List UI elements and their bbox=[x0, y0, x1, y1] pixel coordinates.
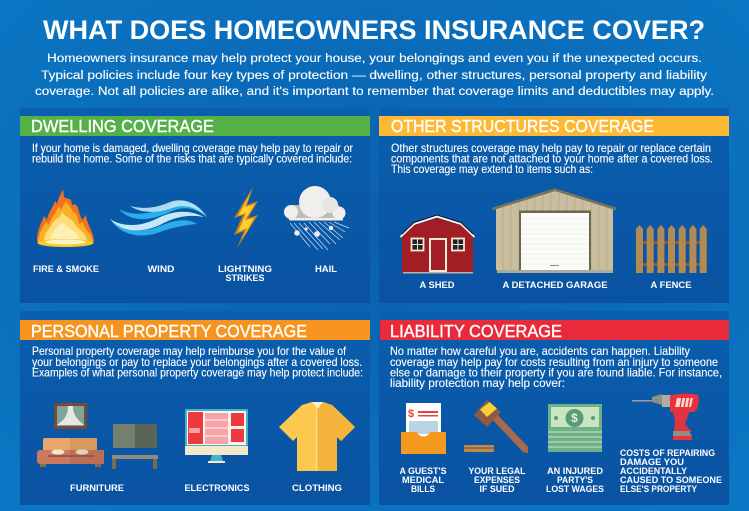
label: a guest's medical bills: A GUEST'S bbox=[400, 465, 446, 476]
icon: medical bills: $ bbox=[408, 408, 414, 420]
liability text: else or damage to their property if you are found liable. For instance, bbox=[390, 366, 722, 380]
label: fire & smoke: FIRE & SMOKE bbox=[33, 263, 99, 274]
label: a detached garage: A DETACHED GARAGE bbox=[502, 279, 608, 290]
other structures text: components that are not attached to your home after a covered loss. bbox=[391, 152, 713, 166]
panel: liability coverage bbox=[379, 311, 729, 505]
label: electronics: ELECTRONICS bbox=[184, 482, 250, 493]
liability text: No matter how careful you are, accidents can happen. Liability bbox=[390, 345, 690, 358]
heading: other structures coverage: OTHER STRUCTURES COVERAGE bbox=[391, 116, 654, 136]
icon: gavel bbox=[464, 400, 528, 453]
icon: wind bbox=[110, 200, 207, 236]
panel: dwelling coverage bbox=[20, 108, 370, 303]
label: an injured party's lost wages bbox=[546, 465, 604, 494]
label: your legal expenses if sued: IF SUED bbox=[480, 483, 515, 494]
label: a guest's medical bills: BILLS bbox=[411, 483, 435, 494]
personal property text: Examples of what personal property coverage may help protect include: bbox=[32, 366, 363, 380]
label: an injured party's lost wages: AN INJURED bbox=[547, 465, 603, 476]
label: costs of repairing damage bbox=[620, 447, 722, 494]
label: lightning strikes: LIGHTNING bbox=[218, 263, 272, 274]
icon: fence bbox=[636, 225, 707, 273]
label: hail: HAIL bbox=[315, 263, 337, 274]
label: your legal expenses if sued: EXPENSES bbox=[474, 474, 520, 485]
label: lightning strikes bbox=[218, 263, 272, 283]
label: an injured party's lost wages: PARTY'S bbox=[557, 474, 593, 485]
label: costs of repairing damage: COSTS OF REPAIRING bbox=[620, 447, 715, 458]
label: costs of repairing damage: ELSE'S PROPERTY bbox=[620, 483, 698, 494]
label: costs of repairing damage: DAMAGE YOU bbox=[620, 456, 684, 467]
title: WHAT DOES HOMEOWNERS INSURANCE COVER? bbox=[43, 15, 705, 45]
label: a shed: A SHED bbox=[420, 279, 455, 290]
icon: medical bills bbox=[401, 403, 446, 454]
label: your legal expenses if sued bbox=[468, 465, 526, 494]
label: a fence: A FENCE bbox=[650, 279, 692, 290]
other structures text: This coverage may extend to items such as: bbox=[391, 163, 593, 176]
personal property text: your belongings or pay to replace your belongings after a covered loss. bbox=[32, 356, 362, 369]
panel: other structures coverage bbox=[379, 108, 729, 303]
liability text bbox=[390, 345, 722, 390]
icon: lost wages: $ bbox=[571, 411, 578, 425]
personal property text bbox=[32, 345, 363, 380]
icon: lost wages bbox=[548, 404, 602, 452]
personal property text: Personal property coverage may help reimburse you for the value of bbox=[32, 345, 347, 358]
icon: fire bbox=[37, 189, 94, 247]
icon: clothing bbox=[279, 402, 355, 471]
icon: drill bbox=[632, 394, 699, 440]
liability text: coverage may help pay for costs resulting from an injury to someone bbox=[390, 356, 718, 369]
liability text: liability protection may help cover: bbox=[390, 377, 565, 390]
heading: personal property coverage: PERSONAL PROPERTY COVERAGE bbox=[31, 321, 307, 341]
icon: hail bbox=[284, 186, 349, 250]
label: costs of repairing damage: ACCIDENTALLY bbox=[620, 465, 688, 476]
dwelling text: If your home is damaged, dwelling coverage may help pay to repair or bbox=[32, 142, 353, 155]
label: clothing: CLOTHING bbox=[292, 482, 342, 493]
label: a guest's medical bills bbox=[400, 465, 446, 494]
dwelling text: rebuild the home. Some of the risks that are typically covered include: bbox=[32, 152, 352, 166]
label: wind: WIND bbox=[148, 263, 175, 274]
label: an injured party's lost wages: LOST WAGES bbox=[546, 483, 604, 494]
icon: lightning bbox=[234, 187, 258, 248]
heading: liability coverage bbox=[380, 320, 729, 341]
intro text: Homeowners insurance may help protect your house, your belongings and even you if the unexpected occurs. bbox=[47, 51, 702, 65]
intro text: Typical policies include four key types of protection — dwelling, other structures, personal property and liability bbox=[41, 68, 708, 82]
other structures text: Other structures coverage may help pay to repair or replace certain bbox=[391, 142, 711, 155]
panel: personal property coverage bbox=[20, 311, 370, 505]
label: your legal expenses if sued: YOUR LEGAL bbox=[468, 465, 526, 476]
intro text: coverage. Not all policies are alike, and it's important to remember that coverage limits and deductibles may apply. bbox=[35, 84, 714, 98]
intro text bbox=[35, 51, 714, 98]
label: furniture: FURNITURE bbox=[70, 482, 124, 493]
label: lightning strikes: STRIKES bbox=[226, 272, 264, 283]
label: a guest's medical bills: MEDICAL bbox=[402, 474, 444, 485]
label: costs of repairing damage: CAUSED TO SOMEONE bbox=[620, 474, 722, 485]
icon: furniture bbox=[37, 403, 158, 469]
icon: shed bbox=[400, 215, 474, 274]
other structures text bbox=[391, 142, 713, 176]
heading: dwelling coverage bbox=[20, 116, 370, 136]
icon: detached garage bbox=[492, 190, 616, 273]
dwelling text bbox=[32, 142, 353, 166]
icon: electronics bbox=[185, 409, 248, 463]
heading: dwelling coverage: DWELLING COVERAGE bbox=[31, 116, 214, 136]
heading: liability coverage: LIABILITY COVERAGE bbox=[390, 321, 562, 341]
